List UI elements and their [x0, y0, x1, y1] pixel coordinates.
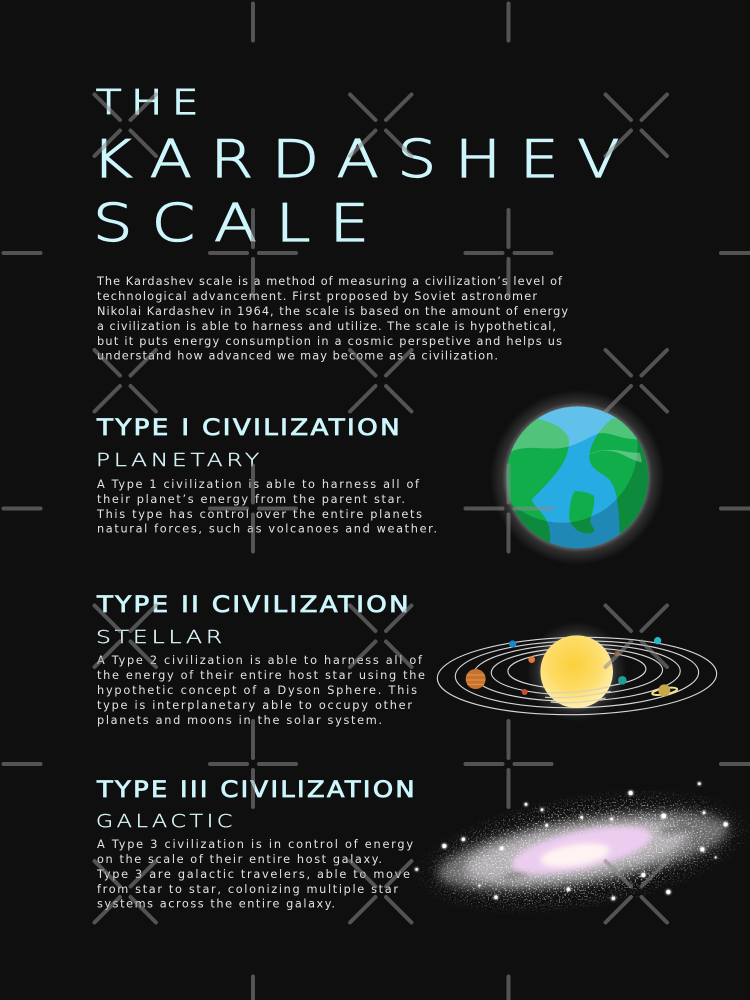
intro text block: a civilization is able to harness and utilize. The scale is hypothetical, [97, 320, 556, 333]
description: type 3 [96, 838, 413, 910]
sun glow [527, 622, 627, 722]
heading: type 3: TYPE III CIVILIZATION [96, 778, 417, 803]
planet: blue [509, 640, 516, 648]
subheading: stellar: STELLAR [96, 627, 226, 648]
description: type 3: Type 3 are galactic travelers, able to move [96, 868, 410, 881]
intro text block: understand how advanced we may become as a civilization. [97, 350, 498, 362]
description: type 2: planets and moons in the solar system. [97, 714, 382, 727]
planet: orange [528, 656, 535, 663]
description: type 2: hypothetic concept of a Dyson Sphere. This [97, 684, 417, 697]
heading: type 1: TYPE I CIVILIZATION [96, 416, 402, 441]
planet: teal [618, 676, 627, 685]
icon: earth planet [493, 393, 662, 562]
planet: jupiter [466, 669, 486, 689]
panel: type 3 civilization [96, 778, 417, 910]
icon: solar system [437, 622, 717, 722]
description: type 3: on the scale of their entire host galaxy. [97, 853, 382, 866]
planet: brown [614, 651, 620, 656]
description: type 2 [97, 654, 425, 727]
heading: type 2: TYPE II CIVILIZATION [96, 593, 411, 618]
galaxy core [508, 817, 656, 883]
description: type 1 [96, 478, 437, 536]
galaxy speckles [416, 790, 750, 914]
intro text block: but it puts energy consumption in a cosmic perspetive and helps us [97, 335, 562, 348]
title: SCALE [93, 194, 388, 254]
description: type 2: A Type 2 civilization is able to harness all of [97, 654, 423, 667]
subheading: galactic: GALACTIC [96, 811, 236, 832]
panel: type 1 civilization [96, 416, 437, 536]
intro text block: Nikolai Kardashev in 1964, the scale is based on the amount of energy [97, 305, 568, 318]
galaxy disc [433, 797, 733, 905]
intro text block: technological advancement. First proposed by Soviet astronomer [97, 290, 537, 303]
title: THE [96, 83, 208, 123]
orbits [437, 635, 717, 717]
intro text block: The Kardashev scale is a method of measuring a civilization’s level of [96, 275, 563, 288]
description: type 3: systems across the entire galaxy. [97, 898, 335, 910]
bright stars [415, 782, 728, 900]
description: type 1: their planet’s energy from the parent star. [97, 493, 405, 506]
description: type 2: the energy of their entire host star using the [97, 669, 425, 682]
description: type 1: A Type 1 civilization is able to harness all of [97, 478, 420, 491]
front orbit arcs [545, 687, 611, 703]
description: type 1: natural forces, such as volcanoes and weather. [97, 522, 437, 536]
title [92, 83, 638, 254]
description: type 3: from star to star, colonizing multiple star [97, 883, 398, 896]
icon: galaxy [413, 780, 750, 914]
subheading: planetary: PLANETARY [96, 450, 263, 471]
panel: type 2 civilization [96, 593, 425, 727]
description: type 3: A Type 3 civilization is in control of energy [97, 838, 413, 851]
intro text block [96, 275, 568, 362]
description: type 1: This type has control over the entire planets [96, 508, 422, 521]
description: type 2: type is interplanetary able to occupy other [97, 699, 412, 712]
sun [540, 635, 613, 708]
planet: red [522, 689, 528, 695]
planet: cyan [654, 637, 661, 644]
title: KARDASHEV [92, 130, 638, 190]
planet: saturn [652, 684, 678, 696]
